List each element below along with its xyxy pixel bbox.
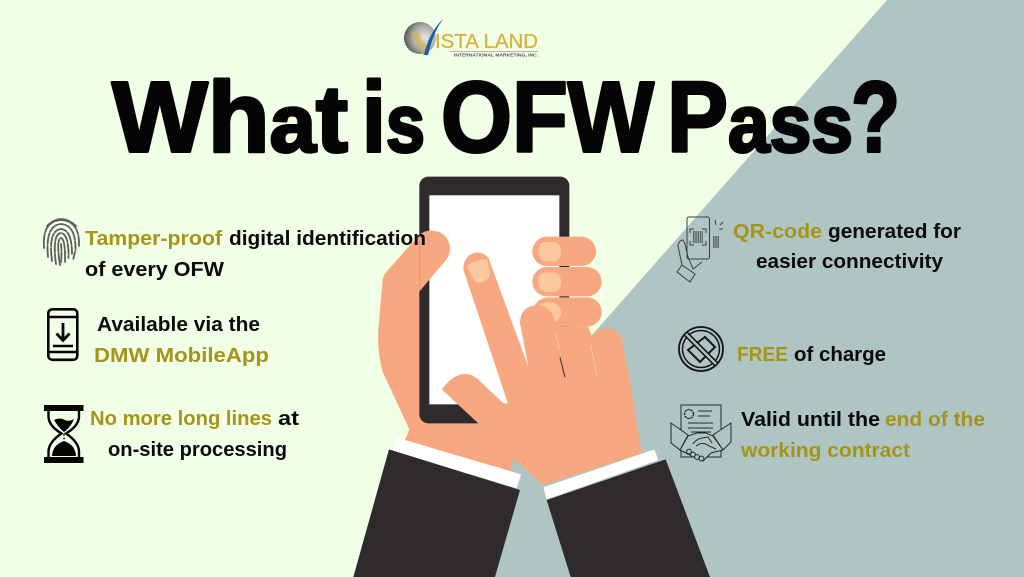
title [112,62,900,174]
text: valid until: Valid until the [741,408,880,431]
left thumb [419,231,450,292]
logo: Vista Land: ISTA LAND [435,31,538,53]
logo: Vista Land [404,18,538,58]
left cuff [393,438,521,488]
text: tamper-proof [85,227,426,281]
text: tamper-proof: of every OFW [85,258,225,281]
icon: hourglass [44,405,84,463]
phone [419,177,569,423]
text: no more long lines: at [278,407,299,430]
text: valid until: end of the [885,408,985,431]
text: free of charge: of charge [794,343,886,366]
index fingernail [467,259,490,283]
logo: Vista Land: INTERNATIONAL MARKETING, INC. [454,52,538,58]
illustration: hands holding phone [353,177,710,577]
text: no more long lines [90,407,299,461]
left sleeve [353,449,520,577]
finger creases [556,333,597,377]
right cuff [543,449,658,499]
teal diagonal panel [379,0,1024,577]
wrapping fingers [532,237,602,327]
title: ? [851,62,900,174]
icon: fingerprint [44,219,79,265]
text: DMW app: Available via the [97,313,260,336]
text: QR code: generated for [828,220,961,243]
text: DMW app: DMW MobileApp [94,344,269,367]
text: no more long lines: No more long lines [90,407,272,430]
text: QR code: easier connectivity [756,250,944,273]
text: free of charge [737,343,886,366]
text: tamper-proof: Tamper-proof [85,227,222,250]
title: What [112,62,348,174]
text: QR code: QR-code [733,220,822,243]
title: OFW [441,62,655,174]
title: is [362,62,425,174]
text: valid until: working contract [740,439,910,462]
text: no more long lines: on-site processing [108,438,287,461]
icon: no money [679,327,723,371]
right sleeve [547,459,710,577]
icon: mobile download [48,309,77,360]
title: Pass [667,62,853,174]
text: tamper-proof: digital identification [229,227,426,250]
text: QR code [733,220,961,273]
icon: contract handshake [671,405,731,461]
icon: QR code in hand [677,217,723,282]
text: valid until [740,408,985,462]
text: free of charge: FREE [737,343,788,366]
text: DMW app [94,313,269,367]
right hand [442,252,642,485]
left palm [378,235,515,472]
